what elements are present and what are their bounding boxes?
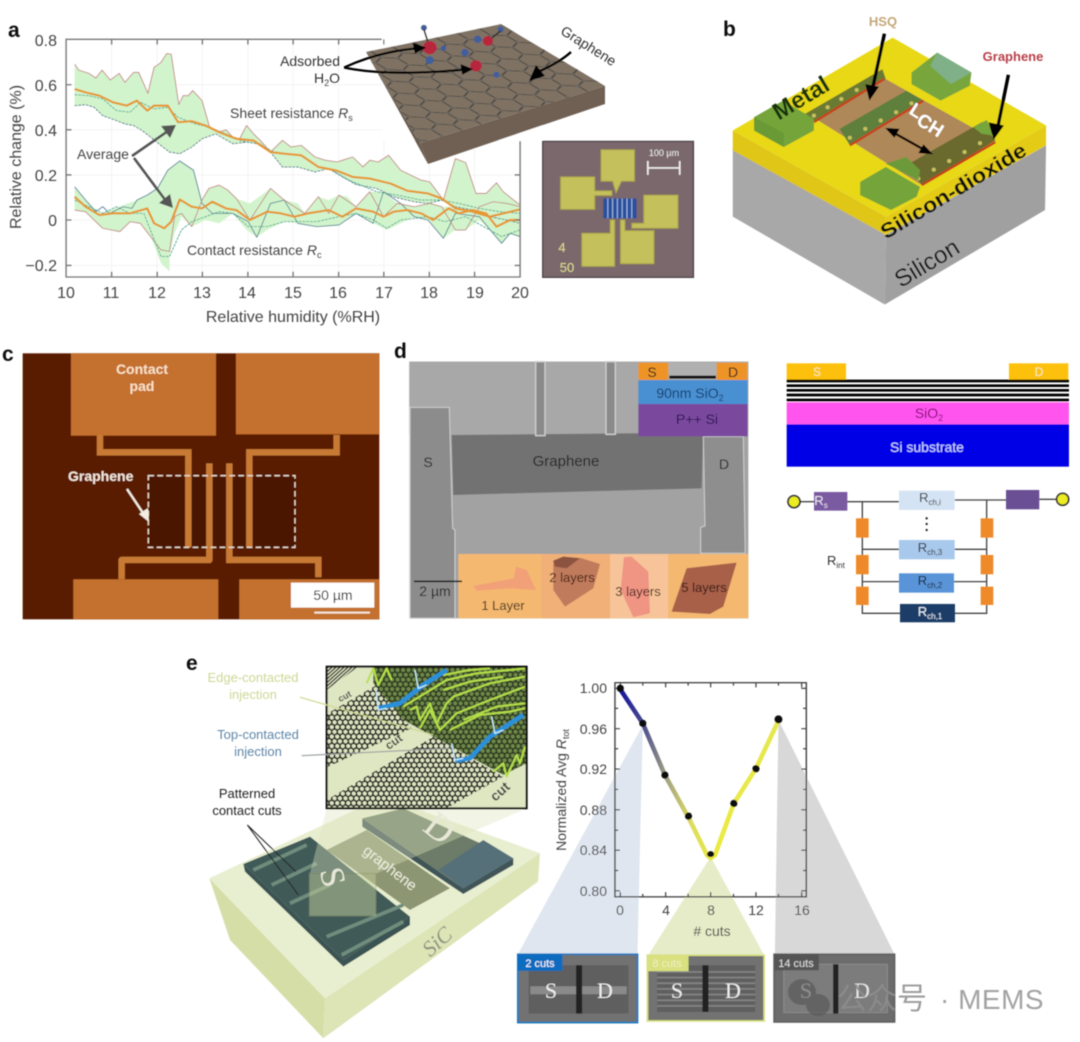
panel label b: b <box>723 18 736 41</box>
label Rs: R <box>814 493 824 508</box>
panel label a: a <box>8 19 20 42</box>
scale label: 2 µm <box>419 583 451 599</box>
label: adsorbed water: Adsorbed <box>280 53 340 69</box>
panel c: optical micrograph <box>2 343 379 619</box>
device stack drawing <box>733 38 1046 305</box>
label: LCH: L <box>905 99 926 123</box>
thumbnail: 14 cuts: D <box>854 978 870 1003</box>
substrate label: Si substrate <box>890 439 964 455</box>
arrow: graphene <box>529 52 571 81</box>
label Rch,3: ch,3 <box>927 548 943 557</box>
x-axis tick labels <box>57 285 529 302</box>
x tick labels: 16 <box>794 902 810 918</box>
y tick labels: 0.92 <box>580 761 607 777</box>
inset stack <box>638 363 748 380</box>
circuit model <box>788 490 1069 622</box>
flake label 2 layers: 2 layers <box>549 570 595 585</box>
contact letter D: D <box>416 804 463 854</box>
label: H2O: H <box>314 70 324 86</box>
label: SiC: SiC <box>417 921 457 961</box>
watermark <box>788 979 1044 1016</box>
x tick labels: 0 <box>616 902 624 918</box>
series label: contact resistance: Contact resistance R <box>187 242 317 258</box>
illustration: water adsorbed on graphene slab <box>280 22 619 164</box>
label: graphene: Graphene <box>558 22 619 69</box>
label Rch,2: ch,2 <box>927 581 943 590</box>
y tick labels: 0.80 <box>580 883 607 899</box>
flake label 5 layers: 5 layers <box>681 580 727 595</box>
x-axis tick labels: 15 <box>284 285 302 302</box>
x tick labels <box>616 902 810 918</box>
label: patterned cuts line 2: contact cuts <box>212 803 282 818</box>
y tick labels: 0.88 <box>580 802 607 818</box>
panel label e: e <box>186 652 198 675</box>
x-axis tick labels: 19 <box>466 285 484 302</box>
x-axis tick labels: 11 <box>103 285 119 302</box>
inset label SiO2: 90nm SiO <box>656 385 719 401</box>
cross-section diagram <box>787 363 1069 467</box>
label: contact pad line 2: pad <box>130 378 154 394</box>
water molecules <box>421 25 504 78</box>
x tick labels: 8 <box>707 902 715 918</box>
label: LCH: CH <box>913 110 947 142</box>
label: top-contacted injection line 2: injection <box>234 744 282 759</box>
chip number 50: 50 <box>560 260 574 275</box>
label: metal: Metal <box>768 71 834 126</box>
cut label 3: cut <box>486 778 513 804</box>
scale bar label: 100 µm <box>649 148 679 158</box>
thumbnail: 8 cuts <box>647 955 764 1021</box>
x-axis tick labels: 16 <box>329 285 347 302</box>
y-axis tick labels: 0.8 <box>35 33 57 50</box>
panel label d: d <box>394 340 407 363</box>
y-axis tick labels <box>25 33 57 275</box>
x-axis title: Relative humidity (%RH) <box>206 309 380 326</box>
x-axis tick labels: 18 <box>420 285 438 302</box>
y-axis tick labels: 0.4 <box>35 123 57 140</box>
translucent beam <box>310 808 527 873</box>
label: silicon: Silicon <box>890 234 964 293</box>
SEM label graphene: Graphene <box>533 453 599 470</box>
thumbnail: 2 cuts: D <box>597 978 613 1003</box>
label: graphene: Graphene <box>68 468 134 484</box>
thumbnail: 2 cuts <box>518 954 637 1023</box>
contact strips <box>802 69 886 122</box>
arrow: HSQ <box>865 34 884 101</box>
drain contact <box>362 818 513 894</box>
label Rint: R <box>827 553 836 568</box>
inset: graphene lattice close-up <box>300 667 527 808</box>
inset label D: D <box>728 364 738 380</box>
label: average: Average <box>77 146 129 162</box>
source contact <box>243 864 410 967</box>
arrow: graphene <box>989 75 1008 140</box>
label: graphene: Graphene <box>983 49 1043 64</box>
x-axis tick labels: 20 <box>511 285 529 302</box>
x-axis tick labels: 14 <box>238 285 256 302</box>
inset label SiO2: 2 <box>719 393 724 403</box>
x-axis tick labels: 17 <box>375 285 393 302</box>
micrograph <box>23 353 379 619</box>
y-axis title: Relative change (%) <box>8 85 25 229</box>
y tick labels: 0.84 <box>580 842 607 858</box>
panel a: humidity response chart with graphene inset <box>8 11 693 326</box>
inset label silicon: P++ Si <box>676 411 718 427</box>
label: H2O: 2 <box>324 78 329 88</box>
watermark text: 公众号 <box>837 983 927 1016</box>
D label: D <box>1035 365 1044 379</box>
flake label 3 layers: 3 layers <box>615 584 661 599</box>
thumbnail: 14 cuts <box>774 954 894 1022</box>
panel d: SEM image and layered device <box>394 340 1069 622</box>
SEM image <box>409 362 748 618</box>
x-axis tick labels: 12 <box>148 285 166 302</box>
label: edge-contacted injection line 2: injection <box>229 687 277 702</box>
thumbnail: 2 cuts: 2 cuts <box>525 958 555 970</box>
thumbnail: 14 cuts: S <box>800 978 812 1003</box>
watermark separator and name: · MEMS <box>940 984 1044 1015</box>
label Rs: s <box>824 501 828 510</box>
label: edge-contacted injection line 1: Edge-contacted <box>207 670 299 685</box>
y-axis tick labels: 0 <box>48 213 57 230</box>
SiC device illustration <box>209 786 540 1038</box>
S label: S <box>813 365 821 379</box>
inset label S: S <box>647 364 657 380</box>
x-axis tick labels: 10 <box>57 285 75 302</box>
y-axis tick labels: 0.2 <box>35 168 57 185</box>
label Rch,3: R <box>918 540 927 555</box>
label: contact pad line 1: Contact <box>116 361 168 377</box>
x tick labels: 12 <box>748 902 764 918</box>
y axis title: tot <box>561 729 571 739</box>
series label: sheet resistance: Sheet resistance R <box>230 105 348 121</box>
label: graphene: graphene <box>360 842 420 895</box>
contact letter S: S <box>312 863 352 891</box>
leader lines <box>247 825 298 895</box>
arrow: channel length <box>885 128 933 154</box>
x axis title: # cuts <box>693 923 731 939</box>
flake strip <box>458 554 748 618</box>
thumbnail: 14 cuts: 14 cuts <box>778 958 814 970</box>
arrows: adsorbed water <box>344 43 473 75</box>
SiO2 label: 2 <box>938 413 943 423</box>
panel e: patterned contact cuts <box>186 652 894 1038</box>
SEM label S: S <box>423 454 433 470</box>
chip number 4: 4 <box>558 240 566 255</box>
y tick labels: 0.96 <box>580 721 607 737</box>
label Rch,1: ch,1 <box>927 612 943 621</box>
y tick labels: 1.00 <box>580 680 607 696</box>
SEM label D: D <box>719 456 729 472</box>
metal pads <box>754 101 814 147</box>
icon: chat bubbles <box>788 979 830 1016</box>
x-axis tick labels: 13 <box>193 285 211 302</box>
panel label c: c <box>2 343 14 366</box>
y-axis tick labels: −0.2 <box>25 258 57 275</box>
thumbnail: 8 cuts: 8 cuts <box>652 958 682 970</box>
arrow: graphene <box>127 489 149 522</box>
label: H2O: O <box>329 70 340 86</box>
y-axis tick labels: 0.6 <box>35 78 57 95</box>
label: HSQ: HSQ <box>869 14 897 29</box>
scale label: 50 µm <box>313 587 353 603</box>
panel b: device stack illustration <box>723 14 1046 305</box>
label Rch,i: R <box>919 490 928 505</box>
line chart: relative change vs humidity <box>8 11 543 326</box>
label: patterned cuts line 1: Patterned <box>219 786 275 801</box>
cut label 2: cut <box>382 731 405 753</box>
cut label 1: cut <box>336 689 353 704</box>
SiO2 label: SiO <box>915 405 938 421</box>
label Rch,2: R <box>918 573 927 588</box>
thumbnail: 2 cuts: S <box>545 978 557 1003</box>
label: top-contacted injection line 1: Top-contacted <box>217 727 299 742</box>
label Rch,1: R <box>918 604 927 619</box>
inset mask <box>382 11 543 140</box>
label Rch,i: ch,i <box>928 498 941 507</box>
flake label 1 layer: 1 Layer <box>481 598 525 613</box>
series label: sheet resistance: s <box>348 113 353 123</box>
thumbnail: 8 cuts: D <box>725 978 741 1003</box>
y tick labels <box>580 680 607 899</box>
arrows: average <box>132 125 176 208</box>
y axis title: Normalized Avg R <box>553 739 569 851</box>
label Rint: int <box>836 561 846 570</box>
thumbnail: 8 cuts: S <box>671 978 683 1003</box>
label: silicon dioxide: Silicon-dioxide <box>877 139 1031 244</box>
photo inset: device micrograph <box>543 141 693 277</box>
x tick labels: 4 <box>662 902 670 918</box>
chart: normalized resistance vs cuts <box>518 680 894 955</box>
series label: contact resistance: c <box>317 250 322 260</box>
